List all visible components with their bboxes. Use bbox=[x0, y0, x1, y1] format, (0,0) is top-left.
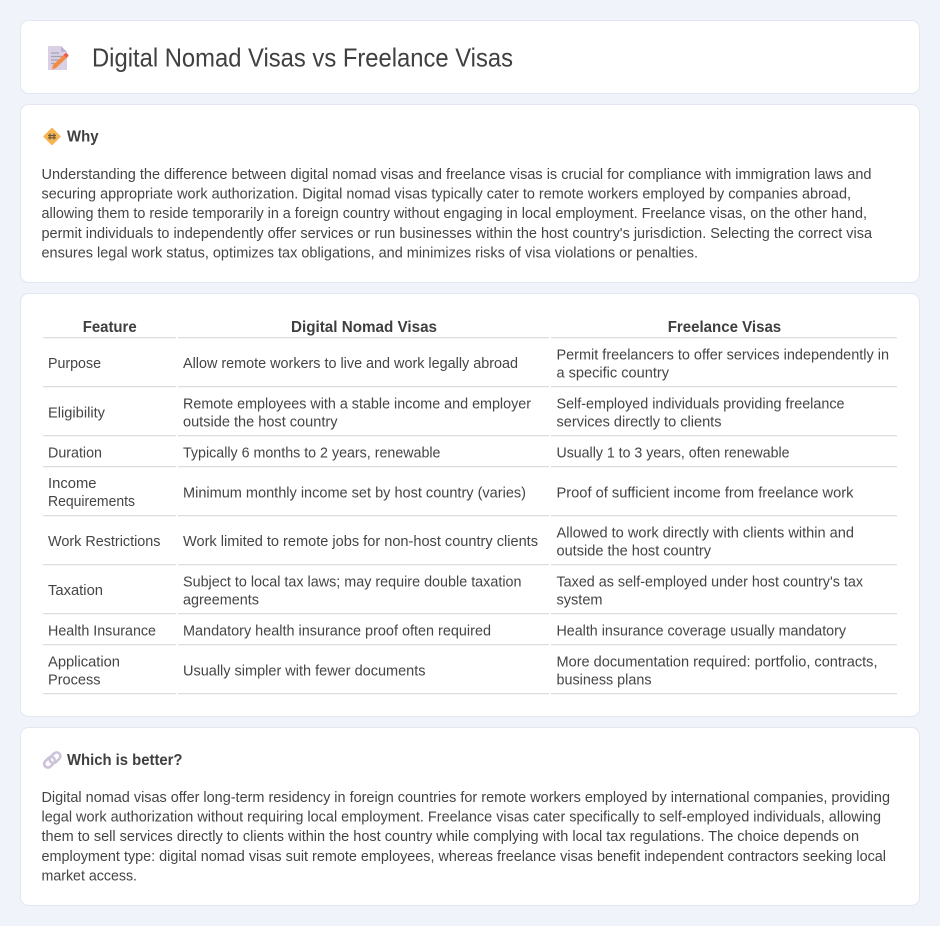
row: purpose: Allow remote workers to live and work legally abroad bbox=[183, 356, 518, 372]
row: work restrictions: Allowed to work directly with clients within and bbox=[556, 525, 854, 541]
text block: which is better paragraph: legal work authorization without requiring local employment. Freelance visas cater specifically to self-employed individuals, allowing bbox=[42, 810, 881, 826]
table header: Feature bbox=[83, 319, 137, 336]
row: work restrictions bbox=[43, 525, 897, 565]
row: duration: Duration bbox=[48, 445, 102, 461]
row: income requirements: Minimum monthly income set by host country (varies) bbox=[183, 485, 526, 501]
title: Digital Nomad Visas vs Freelance Visas bbox=[92, 45, 513, 73]
row: eligibility bbox=[43, 396, 897, 436]
row: health insurance bbox=[43, 623, 897, 645]
row: eligibility: Eligibility bbox=[48, 406, 106, 422]
row: taxation: Taxation bbox=[48, 583, 103, 599]
text block: why paragraph: allowing them to reside temporarily in a foreign country without engaging in local employment. Freelance visas, on the other hand, bbox=[42, 206, 867, 222]
row: purpose: Purpose bbox=[48, 356, 101, 372]
panel: which is better bbox=[20, 728, 920, 906]
icon: chain link bbox=[43, 751, 62, 769]
text block: why paragraph: permit individuals to independently offer services or run businesses within the host country's jurisdiction. Selecting the correct visa bbox=[42, 226, 872, 242]
panel: title card bbox=[20, 20, 920, 94]
row: eligibility: services directly to clients bbox=[556, 414, 722, 430]
row: application process: More documentation required: portfolio, contracts, bbox=[556, 654, 878, 670]
row: purpose: Permit freelancers to offer services independently in bbox=[556, 347, 889, 363]
table header: Digital Nomad Visas bbox=[291, 319, 437, 336]
text block: which is better paragraph: market access. bbox=[42, 868, 137, 884]
row: application process: Process bbox=[48, 672, 100, 688]
row: work restrictions: outside the host country bbox=[556, 543, 712, 559]
row: eligibility: outside the host country bbox=[183, 414, 338, 430]
row: income requirements: Income bbox=[48, 476, 96, 492]
row: eligibility: Remote employees with a stable income and employer bbox=[183, 396, 531, 412]
icon: warning diamond bbox=[44, 128, 60, 144]
row: income requirements bbox=[43, 476, 897, 516]
heading: which is better: Which is better? bbox=[67, 752, 182, 769]
row: application process: Usually simpler with fewer documents bbox=[183, 663, 426, 679]
row: application process bbox=[43, 654, 897, 694]
row: taxation: agreements bbox=[183, 592, 259, 608]
row: income requirements: Proof of sufficient income from freelance work bbox=[556, 485, 854, 501]
table header bbox=[43, 319, 897, 338]
panel: comparison table bbox=[20, 294, 920, 716]
row: health insurance: Health Insurance bbox=[48, 623, 156, 639]
row: eligibility: Self-employed individuals providing freelance bbox=[556, 396, 844, 412]
row: duration: Usually 1 to 3 years, often renewable bbox=[556, 445, 790, 461]
icon: document with pencil bbox=[48, 46, 68, 70]
row: health insurance: Health insurance coverage usually mandatory bbox=[556, 623, 847, 639]
row: taxation bbox=[43, 574, 897, 614]
text block: which is better paragraph: employment type: digital nomad visas suit remote employees, whereas freelance visas benefit independent contractors seeking local bbox=[42, 849, 886, 865]
row: taxation: system bbox=[556, 592, 603, 608]
text block: which is better paragraph: them to sell services directly to clients within the host country while complying with local tax regulations. The choice depends on bbox=[42, 829, 859, 845]
text block: why paragraph: Understanding the difference between digital nomad visas and freelance visas is crucial for compliance with immigration laws and bbox=[42, 167, 872, 183]
row: purpose: a specific country bbox=[556, 365, 670, 381]
row: work restrictions: Work Restrictions bbox=[48, 534, 160, 550]
text block: which is better paragraph bbox=[42, 790, 890, 884]
text block: which is better paragraph: Digital nomad visas offer long-term residency in foreign countries for remote workers employed by international companies, providing bbox=[42, 790, 890, 806]
row: duration bbox=[43, 445, 897, 467]
row: application process: Application bbox=[48, 654, 120, 670]
row: taxation: Subject to local tax laws; may require double taxation bbox=[183, 574, 522, 590]
table header: Freelance Visas bbox=[668, 319, 781, 336]
panel: why bbox=[20, 104, 920, 282]
heading: why: Why bbox=[67, 129, 99, 146]
row: income requirements: Requirements bbox=[48, 494, 135, 510]
text block: why paragraph bbox=[42, 167, 872, 261]
text block: why paragraph: securing appropriate work authorization. Digital nomad visas typically cater to remote workers employed by companies abroad, bbox=[42, 187, 851, 203]
row: purpose bbox=[43, 347, 897, 387]
row: work restrictions: Work limited to remote jobs for non-host country clients bbox=[183, 534, 538, 550]
row: health insurance: Mandatory health insurance proof often required bbox=[183, 623, 491, 639]
row: duration: Typically 6 months to 2 years, renewable bbox=[183, 445, 440, 461]
row: application process: business plans bbox=[556, 672, 652, 688]
text block: why paragraph: ensures legal work status, optimizes tax obligations, and minimizes risks of visa violations or penalties. bbox=[42, 245, 698, 261]
row: taxation: Taxed as self-employed under host country's tax bbox=[556, 574, 864, 590]
